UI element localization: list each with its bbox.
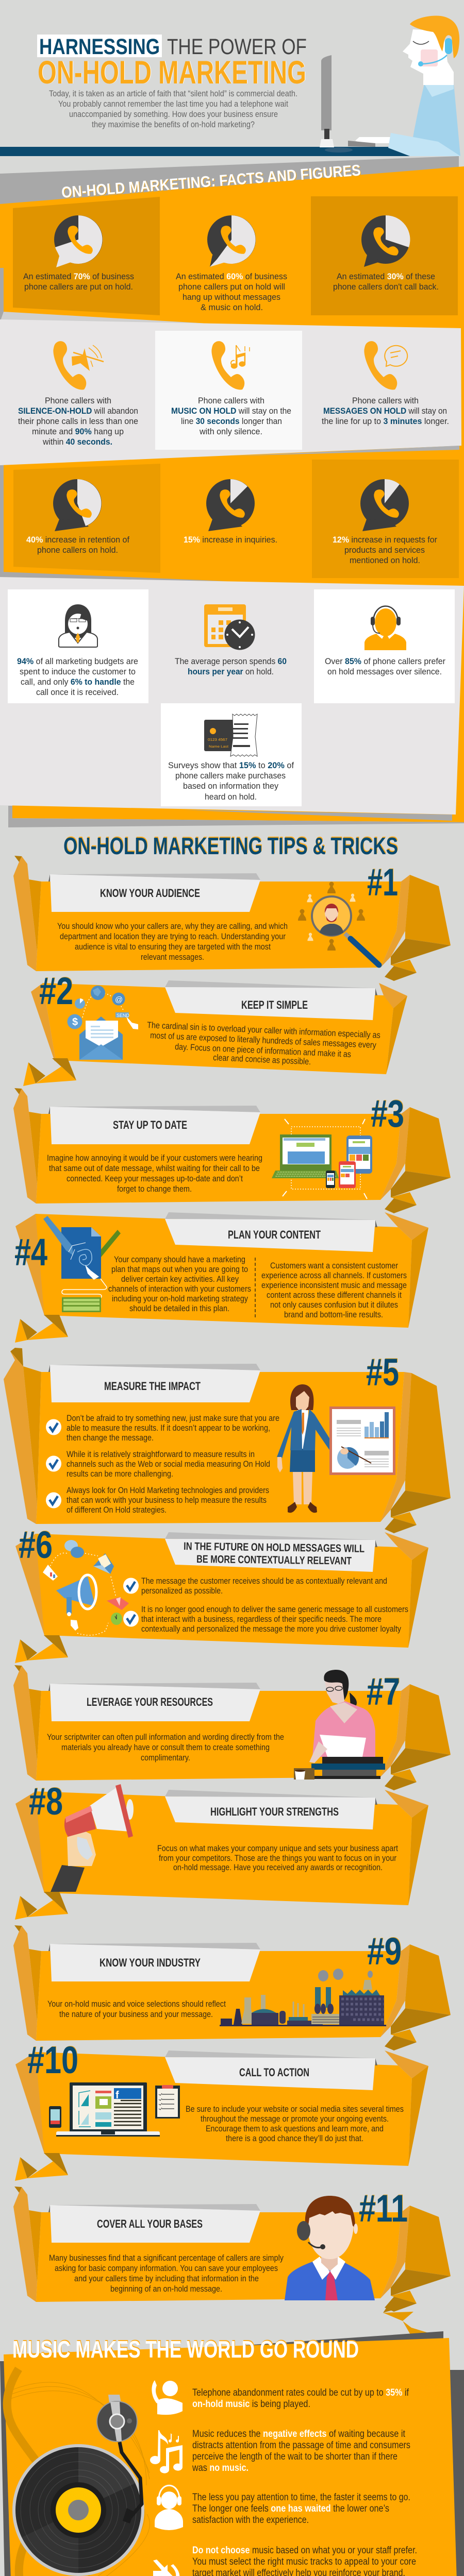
tip body: department and location they are trying to reach. Understanding your <box>60 931 286 941</box>
checklist: that interact with a business, regardless of their specific needs. The more <box>141 1614 382 1624</box>
panel: statistics <box>0 577 464 827</box>
text: surveys show: heard on hold. <box>205 792 257 802</box>
title: THE POWER OF <box>167 35 307 59</box>
illustration: agent with headset <box>285 2196 375 2300</box>
tip heading: STAY UP TO DATE <box>113 1118 187 1131</box>
tip heading: KEEP IT SIMPLE <box>241 998 308 1011</box>
intro paragraph: unaccompanied by something. How does your business ensure <box>69 109 278 119</box>
tip body right <box>261 1261 407 1319</box>
text: 60 hours per year: The average person spends 60 <box>175 656 287 666</box>
tip body: Your scriptwriter can often pull information and wording directly from the <box>47 1732 284 1742</box>
illustration: call centre agent <box>325 15 460 156</box>
item: do not choose: Do not choose music based on what you or your staff prefer. <box>192 2545 417 2556</box>
fact card: 30% don't call back <box>311 196 458 315</box>
icon: credit card and receipt: Name Last <box>209 745 228 749</box>
fact card: 40% retention <box>13 464 160 573</box>
icon: credit card and receipt: 0123 4567 <box>208 738 227 742</box>
number 5: #5 <box>366 1351 399 1394</box>
fact card: 60% hang up: & music on hold. <box>201 302 263 312</box>
number 8: #8 <box>29 1780 63 1823</box>
tip body: connected. Keep your messages up-to-date and don’t <box>67 1174 243 1183</box>
ribbon connector <box>23 1058 76 1086</box>
text: surveys show: Surveys show that 15% to 20% of <box>168 760 294 770</box>
fact card: 12% requests <box>312 460 459 578</box>
tip 11: cover all your bases <box>13 2187 451 2339</box>
tip body left: channels of interaction with your customers <box>108 1284 251 1294</box>
tip heading: BE MORE CONTEXTUALLY RELEVANT <box>196 1553 352 1567</box>
tip heading: COVER ALL YOUR BASES <box>97 2217 203 2230</box>
tip body: day. Focus on one piece of information and make it as <box>175 1042 351 1059</box>
ribbon tail to music section <box>383 2297 443 2339</box>
tip body: beginning of an on-hold message. <box>110 2284 222 2294</box>
tip heading: CALL TO ACTION <box>239 2066 309 2079</box>
text: messages on hold: the line for up to 3 minutes longer. <box>322 416 449 426</box>
text: music on hold: MUSIC ON HOLD will stay on the <box>171 406 291 416</box>
text: 60 hours per year <box>175 656 287 676</box>
text: 60 hours per year: hours per year on hold. <box>188 667 274 676</box>
checklist: contextually and personalized the message the more you drive customer loyalty <box>141 1624 401 1634</box>
icon: calendar and clock <box>204 604 255 650</box>
icon: phone with music notes <box>211 341 250 389</box>
item: negative effects: Music reduces the negative effects of waiting because it <box>192 2429 406 2439</box>
checklist: able to measure the results. If it doesn’t appear to be working, <box>67 1423 270 1433</box>
fact card: 12% requests: 12% increase in requests for <box>333 535 437 545</box>
text: music on hold: line 30 seconds longer than <box>181 416 282 426</box>
text: 85 percent prefer messages: on hold messages over silence. <box>327 667 442 676</box>
tip body right: brand and bottom-line results. <box>284 1310 383 1319</box>
fact card: 70% on hold: phone callers are put on hold. <box>24 282 133 292</box>
item: attention to time: The longer one feels one has waited the lower one’s <box>192 2503 389 2514</box>
text: 94 percent of budgets: call, and only 6% to handle the <box>21 677 135 687</box>
panel: music makes the world go round <box>0 2331 464 2576</box>
icon: envelope and channels: SEND <box>117 1013 130 1018</box>
tip body left <box>108 1255 251 1313</box>
item: do not choose: You must select the right music tracks to appeal to your core <box>192 2556 416 2567</box>
checklist <box>46 1413 279 1515</box>
fact card: 60% hang up: An estimated 60% of business <box>176 272 287 281</box>
fact card: 70% on hold: An estimated 70% of business <box>23 272 134 281</box>
item: abandonment rates: Telephone abandonment rates could be cut by up to 35% if <box>192 2387 409 2398</box>
title: ON-HOLD MARKETING <box>38 55 306 91</box>
heading: facts and figures: ON-HOLD MARKETING: FACTS AND FIGURES <box>61 161 361 201</box>
tip body: the nature of your business and your message. <box>59 2009 213 2019</box>
tip heading <box>184 1540 364 1567</box>
tip body: there is a good chance they’ll do just that. <box>226 2133 363 2143</box>
tip 5: measure the impact <box>4 1348 451 1533</box>
tip body <box>186 2104 404 2143</box>
icon: music notes <box>150 2430 183 2473</box>
fact card: 70% on hold <box>13 197 160 315</box>
icon: person with headphones <box>155 2485 183 2530</box>
checklist: that can work with your business to help measure the results <box>67 1495 267 1505</box>
tip body: throughout the message or promote your ongoing events. <box>201 2114 389 2124</box>
tip body: You should know who your callers are, why they are calling, and which <box>57 921 288 931</box>
heading: music: MUSIC MAKES THE WORLD GO ROUND <box>12 2336 359 2363</box>
tip body: relevant messages. <box>141 952 204 962</box>
tip heading: LEVERAGE YOUR RESOURCES <box>87 1696 213 1708</box>
ribbon connector <box>15 1892 68 1920</box>
number 4: #4 <box>14 1231 47 1274</box>
tip body right: experience inconsistent music and message <box>261 1280 407 1290</box>
tip 3: stay up to date <box>13 1088 451 1213</box>
title <box>37 35 307 91</box>
checklist: then change the message. <box>67 1433 154 1443</box>
tip body: most of us are exposed to literally hundreds of sales messages every <box>150 1030 377 1050</box>
tip body: Many businesses find that a significant percentage of callers are simply <box>49 2253 284 2263</box>
text: messages on hold: Phone callers with <box>352 396 419 405</box>
tip body: forget to change them. <box>117 1184 192 1194</box>
checklist: Don’t be afraid to try something new, just make sure that you are <box>67 1413 279 1423</box>
checklist: It is no longer good enough to deliver the same generic message to all customers <box>141 1604 408 1614</box>
tip heading: MEASURE THE IMPACT <box>104 1380 201 1393</box>
tip 4: plan your content <box>14 1212 428 1328</box>
tip body <box>157 1843 398 1872</box>
tip 6: contextually relevant messages <box>15 1523 428 1648</box>
item: negative effects <box>150 2429 410 2473</box>
tip 9: know your industry <box>13 1925 451 2050</box>
tip body: clear and concise as possible. <box>213 1053 311 1066</box>
tip body: Your on-hold music and voice selections should reflect <box>47 1999 226 2009</box>
tip heading: HIGHLIGHT YOUR STRENGTHS <box>210 1805 339 1818</box>
text: silence on hold: minute and 90% hang up <box>32 427 124 436</box>
text: 94 percent of budgets <box>17 656 138 697</box>
tip body <box>47 1732 284 1762</box>
tip 2: keep it simple <box>31 970 407 1074</box>
hero section <box>0 15 460 156</box>
ribbon connector <box>15 1315 68 1343</box>
tip body: complimentary. <box>141 1753 190 1762</box>
fact card: 15% inquiries: 15% increase in inquiries. <box>184 535 277 545</box>
item: attention to time: satisfaction with the experience. <box>192 2515 309 2526</box>
icon: dashboard on monitor <box>49 2082 180 2137</box>
panel: facts and figures <box>0 156 464 827</box>
intro paragraph <box>49 89 297 129</box>
panel: what callers do <box>0 319 461 465</box>
icon: magnifier over customer <box>298 882 379 965</box>
tip heading: IN THE FUTURE ON HOLD MESSAGES WILL <box>184 1540 364 1555</box>
ribbon <box>31 980 407 1074</box>
tip body: The cardinal sin is to overload your caller with information especially as <box>147 1020 380 1040</box>
text: 94 percent of budgets: call once it is received. <box>36 687 119 697</box>
tip 8: highlight your strengths <box>15 1780 428 1905</box>
fact card: 60% hang up: phone callers put on hold will <box>178 282 285 292</box>
text: silence on hold <box>18 396 138 447</box>
fact card: 40% retention: 40% increase in retention of <box>26 535 129 545</box>
text: silence on hold: within 40 seconds. <box>42 437 112 447</box>
tip body: from your competitors. Those are the things you want to focus on in your <box>159 1853 396 1863</box>
illustration: presenter and chart board <box>277 1384 395 1513</box>
checklist <box>123 1576 408 1634</box>
icon: envelope and channels: @ <box>115 995 123 1004</box>
number 10: #10 <box>27 2039 78 2081</box>
text: 85 percent prefer messages <box>325 656 445 676</box>
text: surveys show: based on information they <box>183 781 278 791</box>
ribbon connector <box>15 2153 68 2181</box>
tip body: Imagine how annoying it would be if your customers were hearing <box>47 1153 262 1163</box>
tip body <box>49 2253 284 2294</box>
icon: phone with speech bubble <box>364 341 407 389</box>
item: abandonment rates <box>152 2380 409 2415</box>
tip body left: should be detailed in this plan. <box>129 1303 229 1313</box>
checklist: The message the customer receives should be as contextually relevant and <box>141 1576 387 1586</box>
tip 7: leverage your resources <box>13 1665 451 1790</box>
checklist: Always look for On Hold Marketing technologies and providers <box>67 1485 269 1495</box>
text: 94 percent of budgets: spent to induce the customer to <box>20 667 136 676</box>
tip heading: KNOW YOUR INDUSTRY <box>100 1956 201 1969</box>
fact card: 12% requests: mentioned on hold. <box>350 555 420 565</box>
text: music on hold: with only silence. <box>199 427 262 436</box>
tip body left: Your company should have a marketing <box>114 1255 245 1264</box>
icon: muted speaker <box>153 2560 183 2576</box>
icon: hand holding red megaphone <box>51 1784 134 1892</box>
icon: envelope and channels: $ <box>72 1016 78 1028</box>
text: 85 percent prefer messages: Over 85% of phone callers prefer <box>325 656 445 666</box>
panel backing <box>0 2331 464 2576</box>
tip body left: deliver certain key activities. All key <box>121 1274 239 1284</box>
tip body right: experience across all channels. If customers <box>261 1270 407 1280</box>
intro paragraph: they maximise the benefits of on-hold marketing? <box>92 120 255 129</box>
illustration: computer monitor <box>320 55 334 147</box>
number 2: #2 <box>39 970 73 1012</box>
item: attention to time: The less you pay attention to time, the faster it seems to go. <box>192 2492 410 2503</box>
text: 94 percent of budgets: 94% of all marketing budgets are <box>17 656 138 666</box>
icon: dashboard on monitor: f <box>115 2090 119 2101</box>
number 3: #3 <box>371 1092 404 1135</box>
intro paragraph: You probably cannot remember the last time you had a telephone wait <box>58 99 288 109</box>
tip heading: PLAN YOUR CONTENT <box>228 1228 321 1241</box>
icon: envelope and channels <box>67 986 138 1060</box>
fact card: 40% retention: phone callers on hold. <box>37 545 118 555</box>
tip body: on-hold message. Have you received any awards or recognition. <box>173 1862 383 1872</box>
icon: woman with headset <box>59 604 97 647</box>
fact card: 60% hang up <box>176 215 287 312</box>
number 7: #7 <box>367 1670 400 1713</box>
desk bar <box>0 147 410 156</box>
icon: agent with headset <box>364 606 406 650</box>
text: messages on hold <box>322 396 449 426</box>
ribbon <box>4 1348 451 1533</box>
tip body <box>47 1153 262 1194</box>
text: silence on hold: their phone calls in less than one <box>18 416 138 426</box>
tip body right: content across these different channels it <box>267 1290 402 1300</box>
item: negative effects: perceive the length of the wait to be shorter than if there <box>192 2451 397 2462</box>
text: music on hold <box>171 396 291 436</box>
tip body: materials you already have or consult them to create something <box>61 1742 270 1752</box>
illustration: factory skyline <box>220 1969 386 2026</box>
icon: planning document <box>43 1216 121 1312</box>
tip body <box>57 921 288 962</box>
tip body: audience is vital to ensuring they are targeted with the most <box>75 942 271 952</box>
item: abandonment rates: on-hold music is being played. <box>192 2399 310 2410</box>
item: negative effects: distracts attention from the passage of time and consumers <box>192 2440 410 2451</box>
text: surveys show <box>168 760 294 802</box>
tip body: that same out of date message, whilst waiting for their call to be <box>49 1163 260 1173</box>
illustration: vinyl record and tonearm <box>12 2395 144 2576</box>
tip body: Be sure to include your website or social media sites several times <box>186 2104 404 2114</box>
checklist: While it is relatively straightforward to measure results in <box>67 1449 255 1459</box>
number 1: #1 <box>367 861 398 904</box>
tip body <box>47 1999 226 2019</box>
fact card: 30% don't call back: phone callers don't call back. <box>333 282 439 292</box>
tip body left: including your on-hold marketing strategy <box>112 1294 248 1303</box>
checklist: results can be more challenging. <box>67 1469 173 1479</box>
icon: phone with muted speaker <box>53 341 104 389</box>
fact card: 15% inquiries <box>184 479 277 545</box>
tip body right: Customers want a consistent customer <box>270 1261 398 1270</box>
number 6: #6 <box>19 1523 53 1566</box>
text: silence on hold: SILENCE-ON-HOLD will abandon <box>18 406 138 416</box>
watermark: treble clef and staff <box>7 2369 150 2576</box>
number 11: #11 <box>359 2187 408 2230</box>
item: negative effects: was no music. <box>192 2463 248 2473</box>
illustration: woman with papers <box>294 1670 385 1780</box>
tip body: Focus on what makes your company unique and sets your business apart <box>157 1843 398 1853</box>
tip 1: know your audience <box>13 856 451 981</box>
number 9: #9 <box>367 1930 402 1973</box>
text: music on hold: Phone callers with <box>198 396 264 405</box>
title: HARNESSING <box>39 35 160 59</box>
checklist: personalized as possible. <box>141 1586 223 1596</box>
checklist: channels such as the Web or social media measuring On Hold <box>67 1459 270 1469</box>
intro paragraph: Today, it is taken as an article of faith that “silent hold” is commercial death. <box>49 89 297 98</box>
tip body left: plan that maps out when you are going to <box>111 1264 248 1274</box>
icon: responsive devices <box>272 1119 372 1199</box>
text: surveys show: phone callers make purchases <box>175 771 286 781</box>
tip 10: call to action <box>15 2039 428 2166</box>
icon: credit card and receipt <box>204 714 257 756</box>
item: attention to time <box>155 2485 410 2530</box>
panel backing <box>0 156 464 822</box>
tip heading: KNOW YOUR AUDIENCE <box>100 887 200 900</box>
fact card: 30% don't call back: An estimated 30% of these <box>337 272 435 281</box>
icon: person on phone <box>152 2380 183 2415</box>
icon: megaphone and messages <box>43 1540 129 1635</box>
tip body <box>147 1020 380 1066</box>
fact card: 60% hang up: hang up without messages <box>183 292 280 302</box>
tip body: and your callers time by including that information in the <box>74 2274 259 2283</box>
fact card: 12% requests: products and services <box>344 545 425 555</box>
text: messages on hold: MESSAGES ON HOLD will stay on <box>323 406 447 416</box>
ribbon connector <box>15 1635 68 1663</box>
tip body right: not only causes confusion but it dilutes <box>270 1300 398 1310</box>
tip body: asking for basic company information. You can save your employees <box>55 2263 278 2273</box>
tip body: Encourage them to ask questions and learn more, and <box>206 2124 384 2133</box>
text: silence on hold: Phone callers with <box>45 396 111 405</box>
item: do not choose <box>153 2545 423 2576</box>
checklist: of different On Hold strategies. <box>67 1505 167 1515</box>
